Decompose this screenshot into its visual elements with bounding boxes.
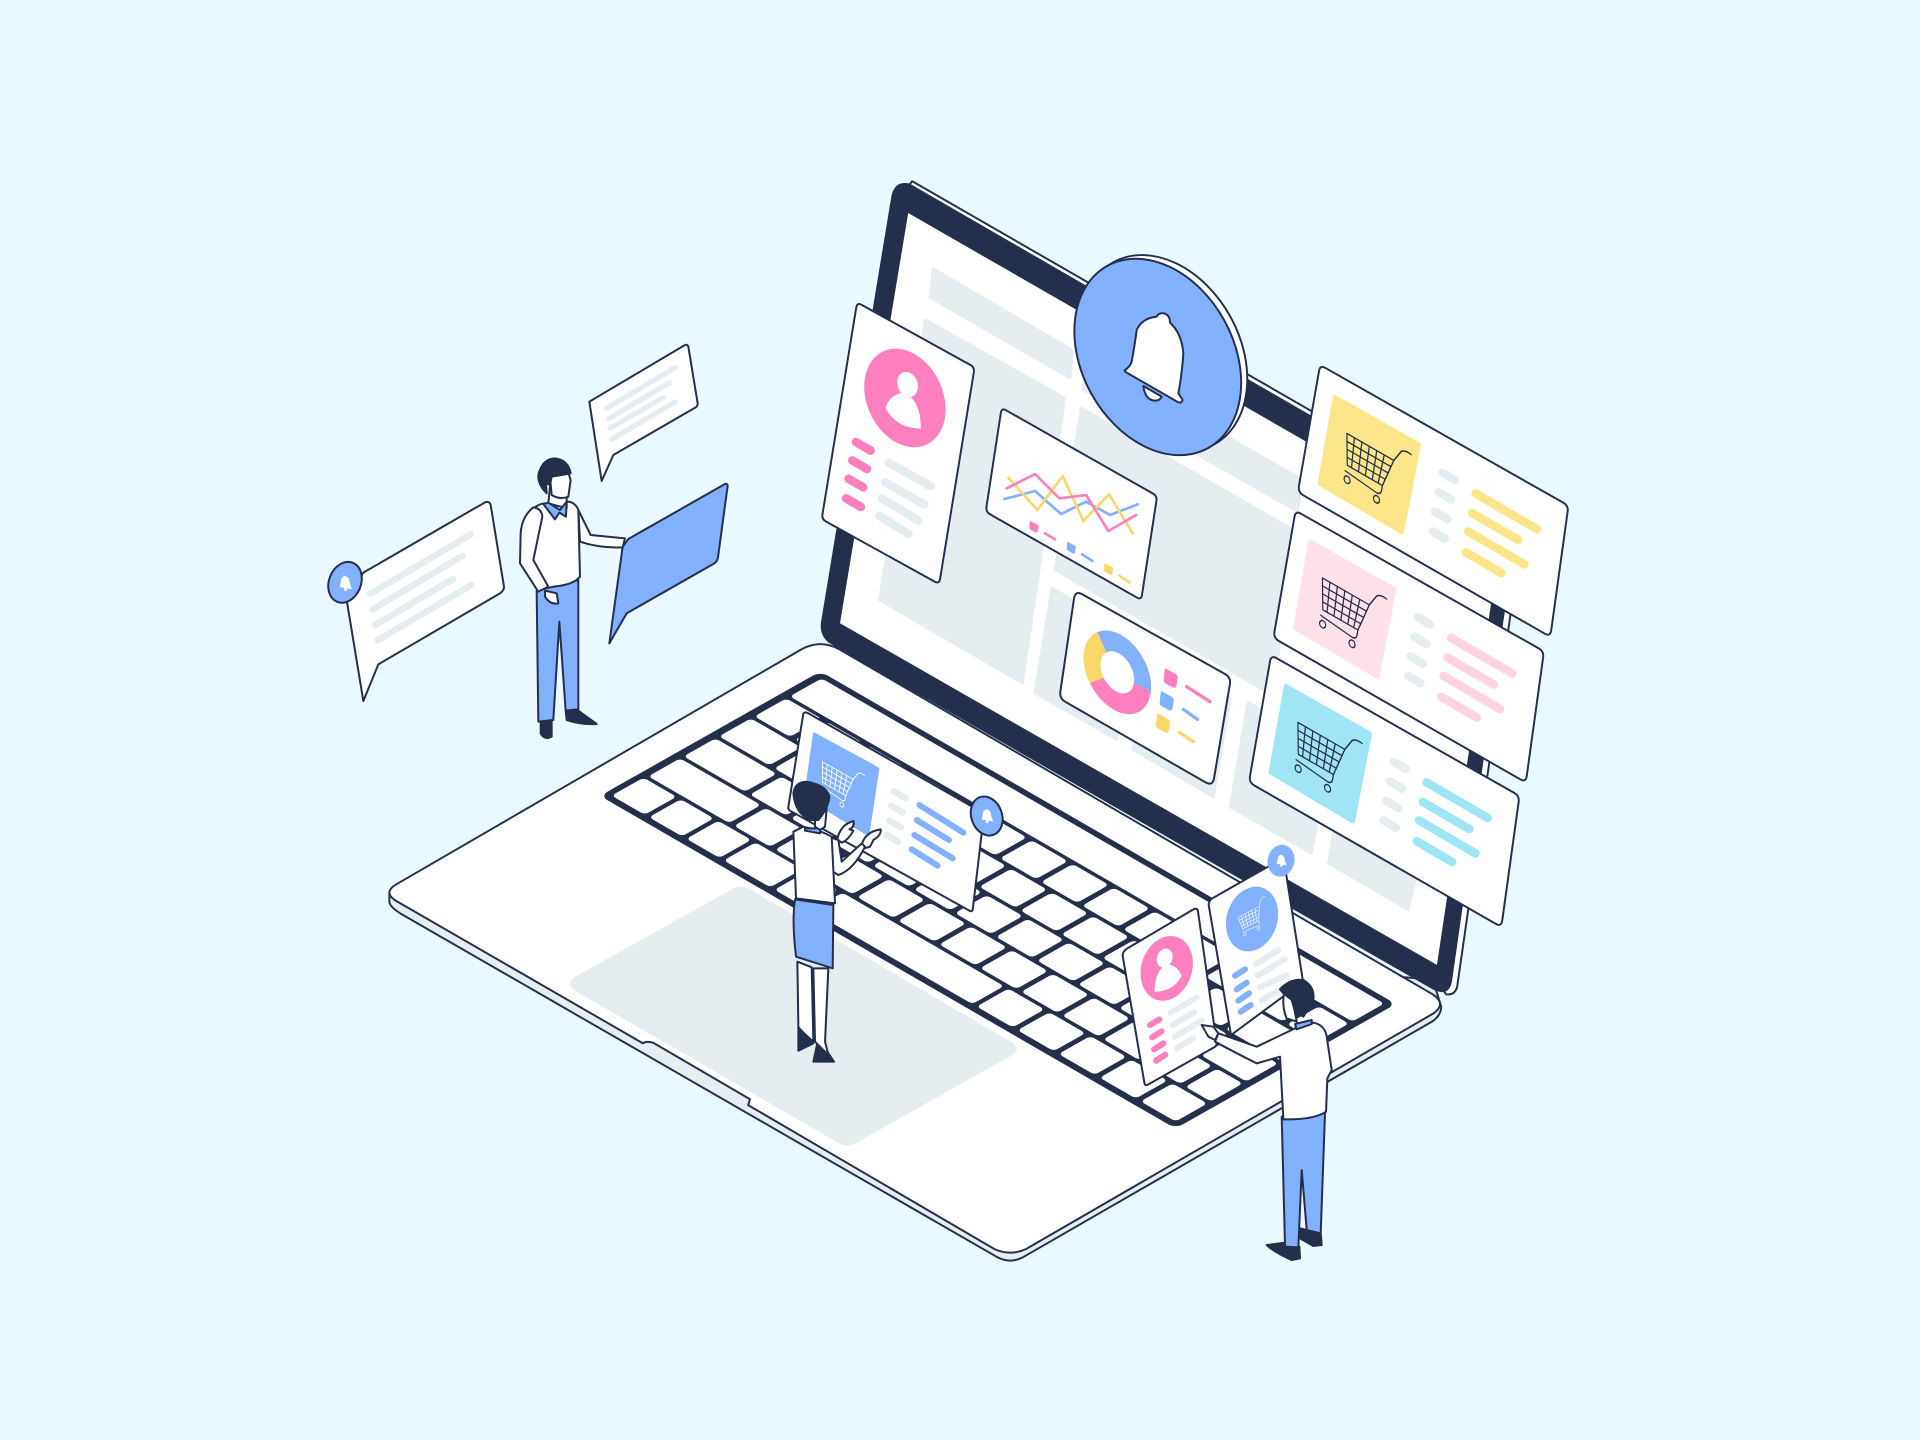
- bell badge: [1041, 225, 1281, 485]
- keyboard: [600, 671, 1396, 1129]
- bell icon: [1125, 313, 1183, 403]
- laptop base: [389, 644, 1441, 1261]
- card: donut chart: [1050, 593, 1230, 784]
- figure: man: [520, 458, 625, 738]
- speech bubble: top: [589, 345, 698, 481]
- right scene: man and phone cards: [1123, 842, 1332, 1260]
- card: user profile: [822, 304, 974, 583]
- centre scene: woman and cart card: [788, 712, 1008, 1062]
- illustration: [327, 180, 1569, 1262]
- floating card: pink profile: [1123, 909, 1217, 1085]
- avatar: [849, 335, 961, 461]
- trackpad: [570, 887, 1017, 1146]
- laptop lid and screen: [821, 181, 1522, 994]
- speech bubble: left with bell: [322, 502, 504, 701]
- card: line chart: [986, 409, 1157, 598]
- screen panels: [879, 268, 1416, 910]
- card: pink cart: [1274, 513, 1543, 780]
- speech bubble: blue: [609, 484, 728, 643]
- donut legend: [1156, 669, 1210, 742]
- card: yellow cart: [1299, 367, 1568, 635]
- figure: man pointing: [1202, 980, 1332, 1260]
- card: cyan cart: [1250, 657, 1519, 925]
- floating card: blue cart: [788, 712, 1008, 911]
- figure: woman: [793, 782, 881, 1062]
- chart legend: [1029, 521, 1129, 582]
- donut: [1084, 630, 1152, 714]
- list bars: [846, 442, 931, 534]
- left scene: man with speech bubbles: [322, 345, 728, 738]
- chart lines: [1004, 474, 1138, 533]
- floating card: blue circle cart: [1209, 842, 1303, 1035]
